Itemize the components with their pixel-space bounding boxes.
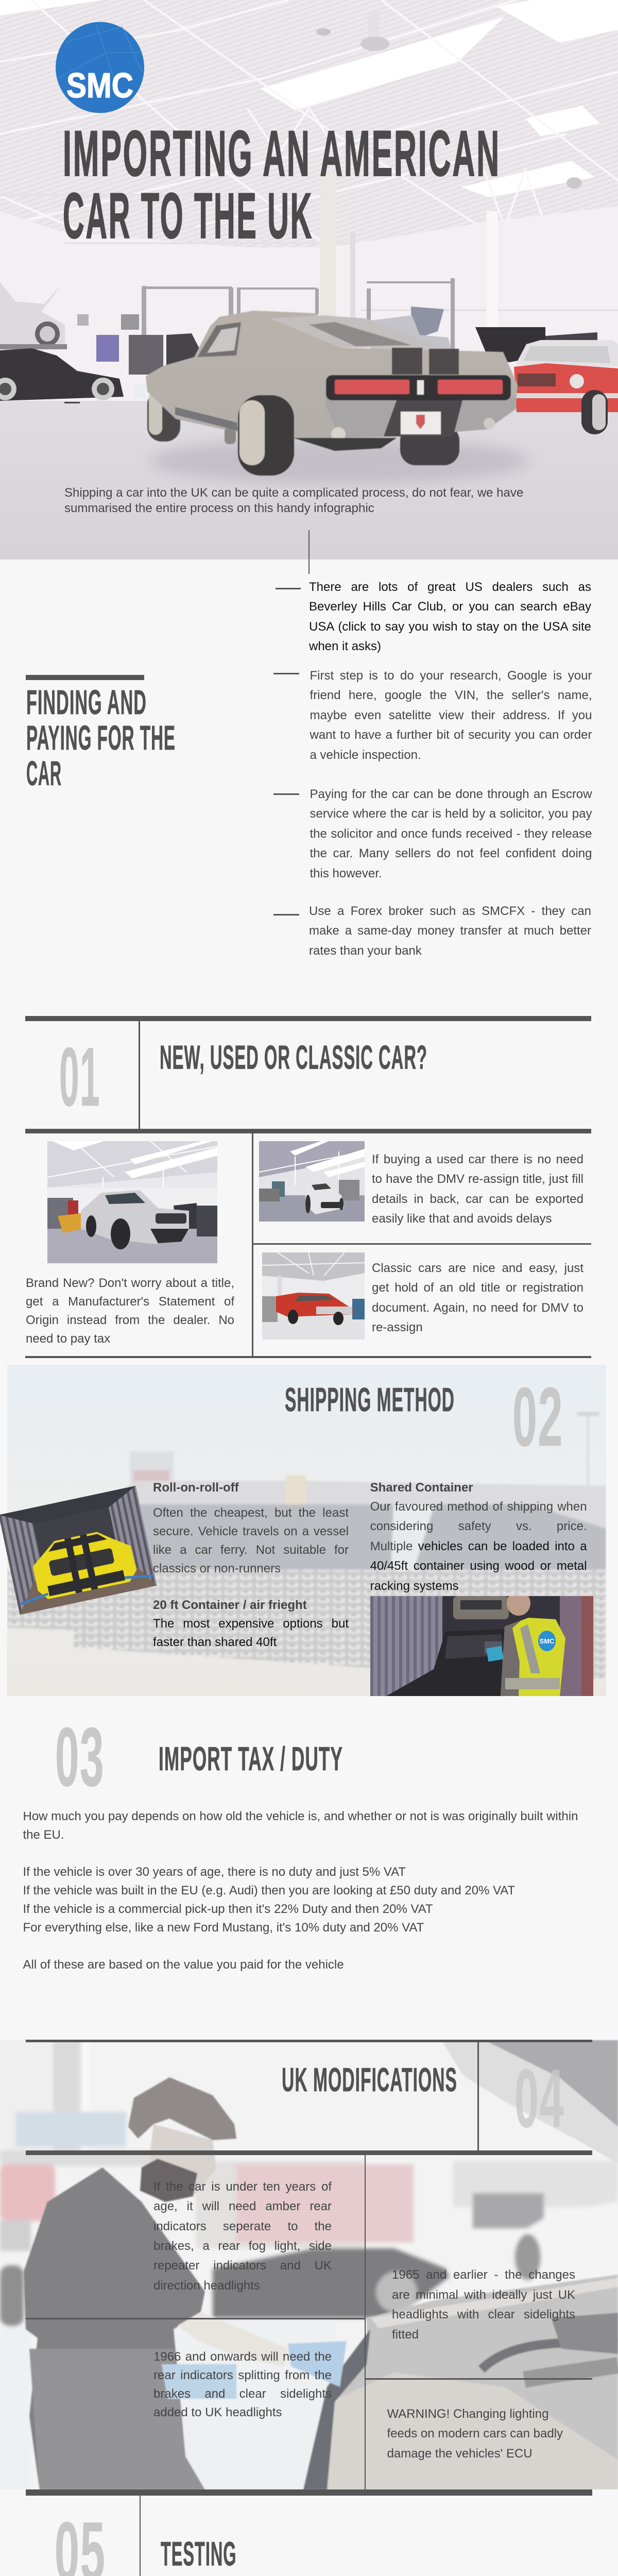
- intro text: summarised the entire process on this handy infographic: [64, 501, 374, 515]
- photo: technician at container: SMC: [539, 1637, 555, 1645]
- text: shared container: Multiple vehicles can be loaded into a: [370, 1539, 587, 1553]
- number 04: 04: [514, 2052, 564, 2144]
- panel: hero: [0, 0, 618, 560]
- text: dealers: USA (click to say you wish to stay on the USA site: [309, 620, 591, 634]
- text: brand new: get a Manufacturer's Statement of: [26, 1295, 234, 1309]
- label: roll-on-roll-off: Roll-on-roll-off: [153, 1481, 239, 1495]
- lifts: [142, 278, 455, 358]
- text: 1965 and earlier: headlights with clear sidelights: [392, 2308, 575, 2321]
- panel: section 03 import tax: [0, 1721, 618, 1978]
- text: research: want to have a further bit of security you can order: [310, 728, 592, 742]
- photo: red classic: [262, 1252, 365, 1340]
- walls: [0, 206, 618, 412]
- text: shared container: racking systems: [370, 1579, 459, 1593]
- text: classic: get hold of an old title or registration: [372, 1281, 583, 1295]
- intro text: [64, 486, 523, 515]
- text: escrow: the solicitor and once funds received - they release: [310, 827, 592, 841]
- panel: section 01 new, used or classic: [25, 1016, 591, 1358]
- text: forex: rates than your bank: [309, 944, 422, 958]
- text: used: details in back, car can be exported: [372, 1192, 583, 1206]
- text: brand new: [26, 1276, 235, 1346]
- text: research: maybe even satelitte view their address. If you: [310, 708, 592, 722]
- text: tax rules: If the vehicle is a commercial pick-up then it's 22% Duty and then 20% VAT: [23, 1902, 433, 1916]
- rule: [26, 2150, 592, 2155]
- heading: SHIPPING METHOD: [284, 1381, 454, 1418]
- text: 20 ft container: [153, 1617, 349, 1649]
- background photo: port with ship and cars: [7, 1365, 606, 1696]
- heading: [26, 683, 176, 793]
- rule left: [26, 2318, 365, 2319]
- text: tax rules: If the vehicle is over 30 years of age, there is no duty and just 5% VAT: [23, 1865, 406, 1879]
- bottom rule: [25, 1356, 591, 1358]
- text: tax rules: the EU.: [23, 1828, 64, 1842]
- divider: [139, 2496, 141, 2576]
- text: shared container: considering safety vs. price.: [370, 1519, 587, 1533]
- text: research: friend here, google the VIN, the seller's name,: [310, 688, 592, 702]
- text: dealers: There are lots of great US dealers such as: [309, 580, 591, 594]
- photo: yellow car in container: [0, 1486, 157, 1615]
- panel: section 05 testing: TESTING: [161, 2535, 236, 2573]
- text: 1965 and earlier: [392, 2265, 575, 2345]
- rule right: [365, 2378, 592, 2380]
- text: research: a vehicle inspection.: [310, 748, 421, 762]
- vertical divider: [252, 1133, 253, 1357]
- text: under ten years: direction headlights: [153, 2279, 260, 2293]
- text: tax rules: How much you pay depends on how old the vehicle is, and whether or not is was originally built within: [23, 1809, 578, 1823]
- text: 1966 onwards: 1966 and onwards will need the: [153, 2350, 332, 2364]
- text: under ten years: indicators seperate to the: [153, 2219, 332, 2233]
- text: 20 ft container: The most expensive options but: [153, 1617, 349, 1631]
- text: forex: make a same-day money transfer at much better: [309, 924, 591, 938]
- divider: [477, 2042, 479, 2150]
- text: research: First step is to do your research, Google is your: [310, 669, 592, 683]
- panel: section 04 uk modifications: [0, 2040, 618, 2496]
- vertical divider: [365, 2155, 366, 2489]
- text: roll-on-roll-off: classics or non-runners: [153, 1562, 281, 1575]
- dash: [276, 588, 301, 589]
- label: 20 ft container: 20 ft Container / air frieght: [153, 1598, 307, 1612]
- text: escrow: the car. Many sellers do not feel confident doing: [310, 846, 592, 860]
- rule: [252, 1243, 591, 1245]
- text: classic: Classic cars are nice and easy, just: [372, 1261, 583, 1275]
- dash: [273, 914, 299, 916]
- text: 1966 onwards: brakes and clear sidelights: [153, 2387, 332, 2401]
- label: shared container: Shared Container: [370, 1481, 473, 1495]
- text: 1966 onwards: rear indicators splitting from the: [153, 2368, 332, 2382]
- text: under ten years: [153, 2177, 332, 2296]
- lamps: [316, 11, 582, 189]
- text: roll-on-roll-off: Often the cheapest, but the least: [153, 1506, 349, 1520]
- panel: section 05 testing: [0, 2496, 618, 2576]
- heading: FINDING AND: [26, 683, 147, 722]
- connector line: [308, 530, 310, 574]
- bottom bar: [26, 2489, 592, 2496]
- text: used: If buying a used car there is no need: [372, 1153, 583, 1166]
- text: used: easily like that and avoids delays: [372, 1212, 552, 1226]
- text: warning: [387, 2404, 563, 2464]
- heading: CAR: [26, 754, 62, 793]
- text: research: [310, 669, 592, 762]
- number 02: 02: [512, 1370, 563, 1464]
- text: 1965 and earlier: are minimal with ideally just UK: [392, 2288, 575, 2302]
- text: under ten years: age, it will need amber rear: [153, 2199, 332, 2213]
- text: shared container: 40/45ft container using wood or metal: [370, 1559, 587, 1573]
- text: dealers: when it asks): [309, 639, 381, 653]
- text: tax rules: All of these are based on the value you paid for the vehicle: [23, 1958, 344, 1972]
- photo: grey mustang: [47, 1141, 217, 1263]
- text: classic: re-assign: [372, 1320, 423, 1334]
- text: dealers: Beverley Hills Car Club, or you can search eBay: [309, 600, 591, 614]
- text: escrow: service where the car is held by a solicitor, you pay: [310, 807, 592, 821]
- top rule: [25, 1016, 591, 1021]
- mechanic: [24, 2167, 205, 2490]
- text: classic: document. Again, no need for DMV to: [372, 1301, 583, 1315]
- number 03: 03: [55, 1710, 105, 1804]
- panel: section 02 shipping method: [0, 1365, 606, 1696]
- heading: UK MODIFICATIONS: [282, 2061, 457, 2098]
- title: CAR TO THE UK: [63, 180, 313, 252]
- text: forex: Use a Forex broker such as SMCFX - they can: [309, 904, 591, 918]
- text: used: [372, 1153, 583, 1226]
- text: tax rules: If the vehicle was built in the EU (e.g. Audi) then you are looking at £50 duty and 20% VAT: [23, 1884, 515, 1897]
- background cars and equipment: [0, 282, 65, 345]
- text: under ten years: If the car is under ten years of: [153, 2180, 332, 2194]
- text: escrow: [310, 787, 592, 880]
- roof trusses: [0, 0, 618, 268]
- text: 1965 and earlier: fitted: [392, 2328, 419, 2342]
- text: warning: damage the vehicles' ECU: [387, 2447, 533, 2461]
- text: 1965 and earlier: 1965 and earlier - the changes: [392, 2268, 575, 2282]
- panel: finding and paying for the car: PAYING FOR THE: [26, 719, 176, 757]
- hero photo: garage with classic car: [0, 0, 618, 560]
- floor: [0, 401, 618, 560]
- intro text: Shipping a car into the UK can be quite a complicated process, do not fear, we have: [64, 486, 523, 500]
- text: roll-on-roll-off: [153, 1506, 349, 1575]
- panel: section 01 new, used or classic: 01: [59, 1030, 100, 1124]
- top rule: [26, 2040, 592, 2042]
- text: 1966 onwards: [153, 2348, 332, 2422]
- text: classic: [372, 1261, 583, 1334]
- text: under ten years: repeater indicators and UK: [153, 2259, 332, 2273]
- text: warning: feeds on modern cars can badly: [387, 2427, 563, 2441]
- red mustang: [475, 327, 545, 362]
- text: forex: [309, 904, 591, 958]
- text: 1966 onwards: added to UK headlights: [153, 2405, 282, 2419]
- text: tax rules: For everything else, like a new Ford Mustang, it's 10% duty and 20% VAT: [23, 1921, 424, 1935]
- photo: white corvette: [259, 1141, 365, 1222]
- text: escrow: this however.: [310, 867, 382, 880]
- title: [63, 118, 501, 252]
- rule: [25, 1129, 591, 1133]
- text: roll-on-roll-off: like a car ferry. Not suitable for: [153, 1543, 349, 1557]
- dash: [273, 673, 299, 674]
- heading bar: [26, 675, 144, 680]
- text: shared container: Our favoured method of shipping when: [370, 1500, 587, 1514]
- text: escrow: Paying for the car can be done through an Escrow: [310, 787, 592, 801]
- text: shared container: [370, 1497, 587, 1596]
- text: roll-on-roll-off: secure. Vehicle travels on a vessel: [153, 1524, 349, 1538]
- text: brand new: Brand New? Don't worry about a title,: [26, 1276, 234, 1290]
- text: 20 ft container: faster than shared 40ft: [153, 1635, 277, 1649]
- text: brand new: need to pay tax: [26, 1332, 110, 1346]
- skylights: [0, 0, 618, 197]
- text: brand new: Origin instead from the dealer. No: [26, 1313, 234, 1327]
- small dash: [64, 402, 80, 403]
- text: used: to have the DMV re-assign title, just fill: [372, 1172, 583, 1186]
- text: under ten years: brakes, a rear fog light, side: [153, 2239, 332, 2253]
- logo: SMC: [56, 22, 144, 113]
- logo: SMC: SMC: [66, 66, 133, 105]
- photo: technician at container: [370, 1596, 593, 1696]
- panel: finding and paying for the car: [26, 580, 592, 958]
- dash: [273, 793, 299, 795]
- heading: IMPORT TAX / DUTY: [159, 1740, 343, 1777]
- text: dealers: [309, 580, 591, 653]
- background photo: mechanic at engine bay: [0, 2040, 618, 2489]
- text: warning: WARNING! Changing lighting: [387, 2407, 548, 2421]
- text: tax rules: [23, 1807, 589, 1974]
- main classic car: [146, 311, 518, 476]
- divider: [139, 1021, 140, 1129]
